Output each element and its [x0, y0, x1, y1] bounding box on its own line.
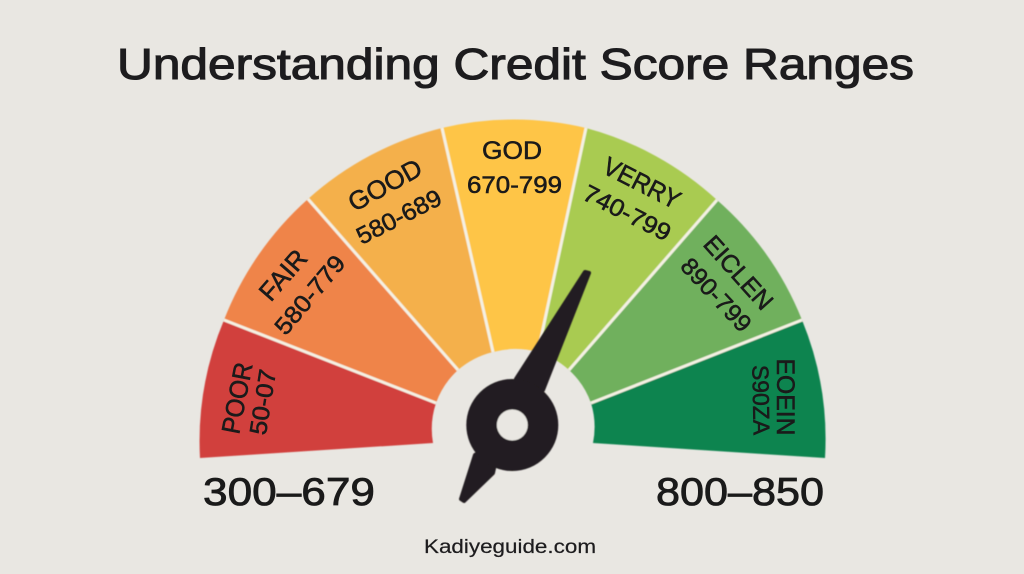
- range: excellent: 890-799: [675, 253, 757, 338]
- range: good: 580-689: [352, 185, 446, 250]
- label: fair: FAIR: [253, 243, 313, 307]
- label: good: GOOD: [343, 152, 427, 218]
- footer website: Kadiyeguide.com: [424, 537, 596, 558]
- icon: gauge needle: [461, 272, 589, 501]
- range: top tier: S90ZA: [747, 365, 775, 436]
- gauge: [200, 120, 826, 458]
- segment: poor: [200, 320, 436, 458]
- segment: god: [442, 120, 586, 352]
- segment: very: [538, 128, 717, 370]
- segment dividers: [224, 128, 802, 403]
- segment: fair: [224, 199, 458, 403]
- title: Understanding Credit Score Ranges: [117, 40, 914, 89]
- segment: top tier: [591, 320, 826, 458]
- range: god: 670-799: [467, 172, 562, 199]
- label: god: GOD: [482, 137, 542, 165]
- label: excellent: EICLEN: [697, 230, 779, 316]
- range: very: 740-799: [578, 180, 675, 247]
- label: very: VERRY: [598, 151, 686, 215]
- range: fair: 580-779: [270, 250, 351, 340]
- gauge labels: [215, 137, 799, 437]
- range: poor: 50-07: [245, 367, 282, 437]
- range label: high: 800–850: [656, 471, 824, 514]
- segment: excellent: [569, 200, 802, 403]
- range label: low: 300–679: [203, 471, 375, 514]
- label: top tier: EOEIN: [771, 358, 799, 436]
- segment: good: [308, 128, 493, 370]
- label: poor: POOR: [215, 360, 259, 436]
